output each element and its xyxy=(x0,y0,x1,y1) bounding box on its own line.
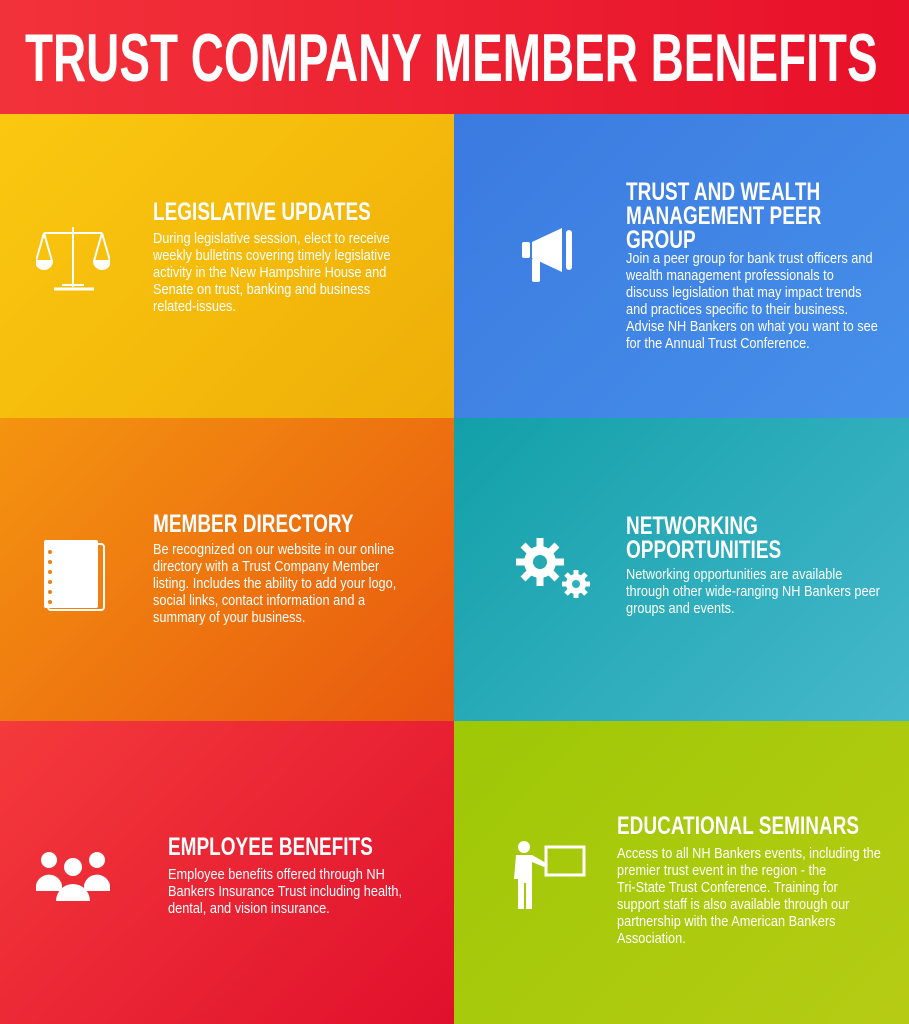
heading xyxy=(626,178,821,254)
panel: legislative updates xyxy=(0,114,454,418)
text: and practices specific to their business. xyxy=(626,302,848,318)
text xyxy=(626,567,880,617)
title: TRUST COMPANY MEMBER BENEFITS xyxy=(25,20,878,96)
heading: MANAGEMENT PEER xyxy=(626,202,821,230)
icon: gears xyxy=(516,538,590,598)
text: premier trust event in the region - the xyxy=(617,863,826,879)
text: partnership with the American Bankers xyxy=(617,914,835,930)
text: wealth management professionals to xyxy=(626,268,834,284)
heading xyxy=(626,512,781,564)
panel: employee benefits xyxy=(0,721,454,1024)
heading: EDUCATIONAL SEMINARS xyxy=(617,812,859,840)
text: Networking opportunities are available xyxy=(626,567,842,583)
text xyxy=(153,231,391,315)
text: groups and events. xyxy=(626,601,735,617)
panel: networking xyxy=(454,418,909,721)
heading: TRUST AND WEALTH xyxy=(626,178,820,206)
heading: MEMBER DIRECTORY xyxy=(153,510,354,538)
text: Tri-State Trust Conference. Training for xyxy=(617,880,838,896)
text: During legislative session, elect to receive xyxy=(153,231,390,247)
icon: megaphone xyxy=(522,228,572,282)
icon: people xyxy=(36,852,110,901)
text: Be recognized on our website in our online xyxy=(153,542,394,558)
heading: OPPORTUNITIES xyxy=(626,536,781,564)
text: dental, and vision insurance. xyxy=(168,901,330,917)
panel: trust and wealth xyxy=(454,114,909,418)
text: support staff is also available through our xyxy=(617,897,849,913)
text: summary of your business. xyxy=(153,610,305,626)
heading: EMPLOYEE BENEFITS xyxy=(168,833,373,861)
text xyxy=(626,251,878,352)
text: Association. xyxy=(617,931,686,947)
text: discuss legislation that may impact trends xyxy=(626,285,861,301)
text xyxy=(153,542,396,626)
icon: scales xyxy=(36,227,110,290)
panel: educational seminars xyxy=(454,721,909,1024)
text: related-issues. xyxy=(153,299,236,315)
heading: NETWORKING xyxy=(626,512,758,540)
text: Advise NH Bankers on what you want to see xyxy=(626,319,878,335)
text: Join a peer group for bank trust officers and xyxy=(626,251,873,267)
panel: member directory xyxy=(0,418,454,721)
text: Employee benefits offered through NH xyxy=(168,867,385,883)
text: through other wide-ranging NH Bankers peer xyxy=(626,584,880,600)
heading: GROUP xyxy=(626,226,696,254)
text: directory with a Trust Company Member xyxy=(153,559,379,575)
icon: presenter xyxy=(514,841,586,909)
icon: book xyxy=(44,540,105,611)
header xyxy=(0,0,909,114)
text: Bankers Insurance Trust including health, xyxy=(168,884,402,900)
text: activity in the New Hampshire House and xyxy=(153,265,386,281)
text: listing. Includes the ability to add your logo, xyxy=(153,576,396,592)
text xyxy=(168,867,402,917)
text xyxy=(617,846,881,947)
heading: LEGISLATIVE UPDATES xyxy=(153,198,371,226)
text: for the Annual Trust Conference. xyxy=(626,336,810,352)
text: Senate on trust, banking and business xyxy=(153,282,370,298)
text: Access to all NH Bankers events, including the xyxy=(617,846,881,862)
text: weekly bulletins covering timely legislative xyxy=(153,248,391,264)
text: social links, contact information and a xyxy=(153,593,365,609)
